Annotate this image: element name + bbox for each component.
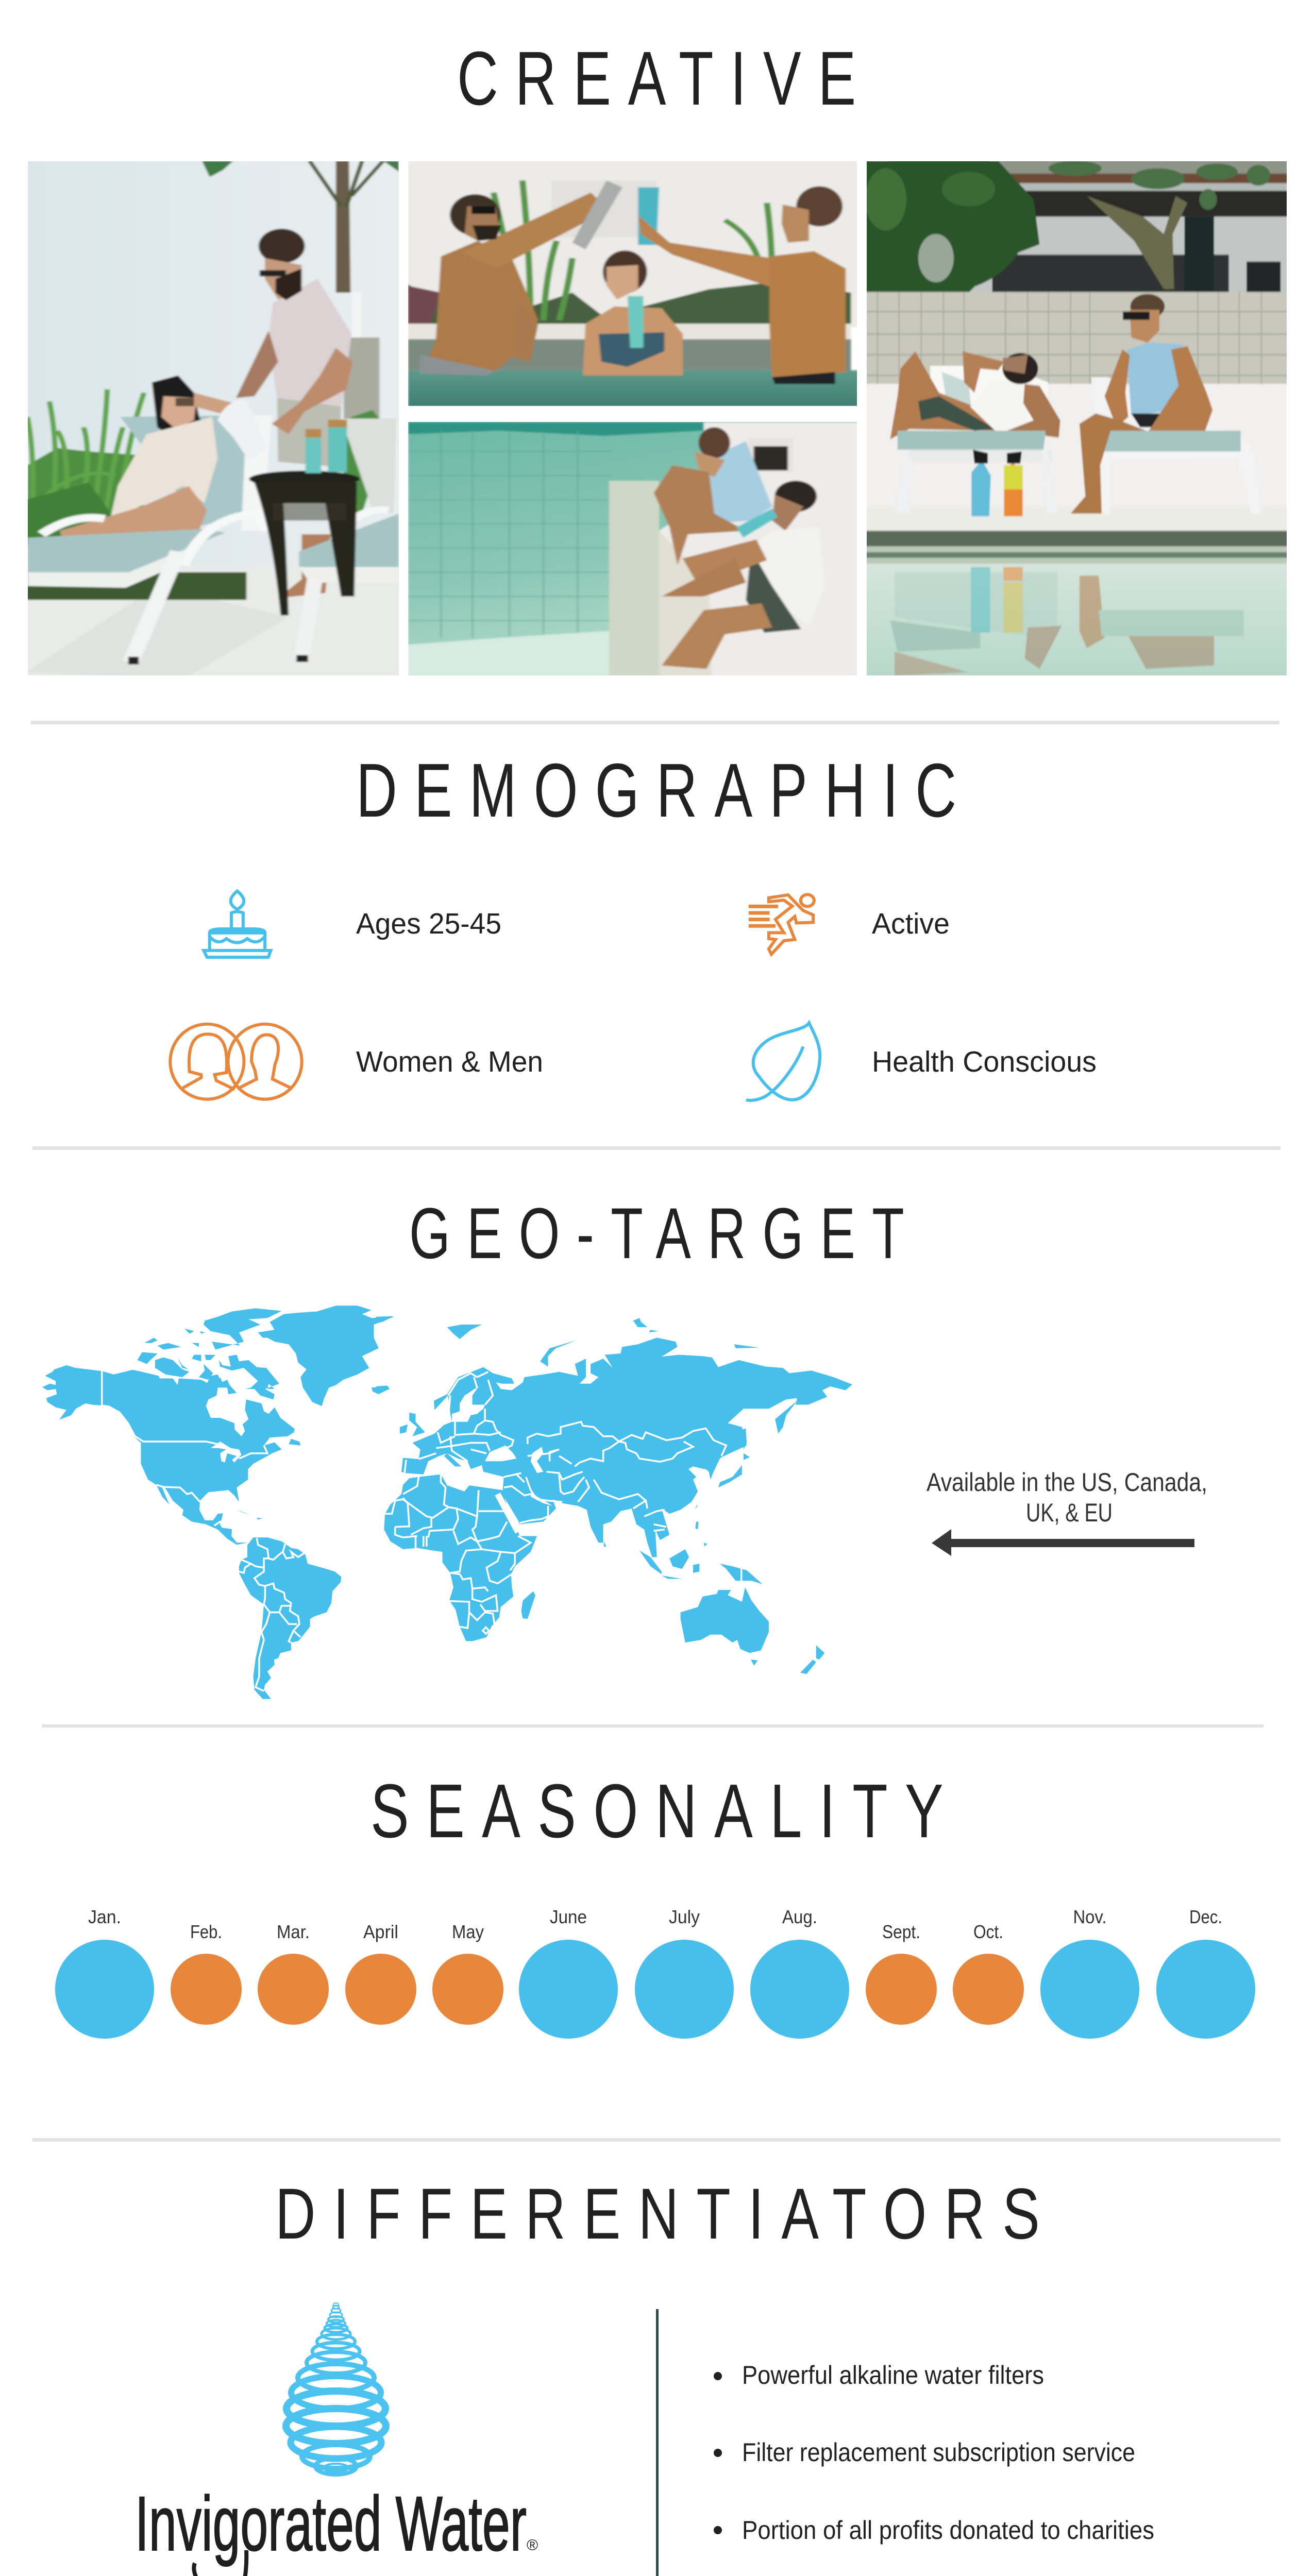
divider: under geo-target [42, 1724, 1264, 1727]
month: july: July [669, 1906, 700, 1927]
month: dec [1156, 1906, 1255, 2039]
chart: monthly seasonality circles [55, 1906, 1255, 2039]
month: nov [1040, 1906, 1139, 2039]
photo: three people toasting bottles in pool [408, 155, 865, 406]
text: availability note: UK, & EU [1026, 1498, 1113, 1527]
month: jan: Jan. [88, 1906, 121, 1927]
borders: old world [385, 1372, 742, 1634]
logo: invigorated water [135, 2303, 538, 2576]
text: registered mark: ® [527, 2537, 538, 2554]
bullet: filters: Powerful alkaline water filters [742, 2361, 1044, 2389]
greenland [258, 1306, 394, 1406]
month: oct [953, 1921, 1024, 2025]
photo: couple by lounge chair with pitcher [26, 155, 404, 679]
vertical divider [656, 2309, 659, 2576]
month: aug [750, 1906, 849, 2039]
divider: under demographic [32, 1146, 1281, 1150]
month: june: June [550, 1906, 587, 1927]
icon: leaf [746, 1023, 820, 1100]
icon: birthday cake [204, 891, 271, 957]
icon: water drop rings [286, 2303, 386, 2475]
photo: two men sitting at pool edge from above [408, 420, 867, 679]
list: differentiators [714, 2361, 1154, 2545]
bullet: charities: Portion of all profits donated to charities [742, 2516, 1154, 2545]
divider: under creative [31, 721, 1279, 724]
red sea [498, 1494, 518, 1532]
icon: g swash [194, 2550, 246, 2576]
madagascar [521, 1591, 535, 1619]
month: dec: Dec. [1189, 1906, 1222, 1927]
title: demographic: DEMOGRAPHIC [356, 748, 973, 833]
tasmania and new zealand [751, 1645, 824, 1674]
icon: woman and man profiles [170, 1024, 302, 1099]
month: july [635, 1906, 734, 2039]
text: women and men: Women & Men [356, 1045, 543, 1078]
panel: demographic attributes [170, 891, 1097, 1100]
arrow: points to map [932, 1529, 1194, 1556]
iceland [372, 1386, 389, 1394]
text: health conscious: Health Conscious [872, 1045, 1097, 1078]
month: oct: Oct. [973, 1921, 1003, 1942]
australia [681, 1587, 769, 1653]
month: mar [258, 1921, 329, 2025]
month: jan [55, 1906, 154, 2039]
panel: creative photo collage [26, 148, 1294, 679]
new guinea [720, 1564, 763, 1584]
title: seasonality: SEASONALITY [370, 1769, 961, 1854]
month: feb: Feb. [190, 1921, 222, 1942]
map: old world [376, 1316, 852, 1674]
title: differentiators: DIFFERENTIATORS [275, 2173, 1057, 2254]
month: april: April [363, 1921, 398, 1942]
text: availability note: Available in the US, Canada, [926, 1468, 1207, 1497]
great lakes [211, 1442, 242, 1463]
month: june [519, 1906, 618, 2039]
month: april [345, 1921, 416, 2025]
month: sept: Sept. [882, 1921, 920, 1942]
islands: europe and arctic [376, 1316, 760, 1436]
islands: southeast asia [604, 1504, 707, 1579]
photo: two men on loungers with bottles above pool reflection [850, 148, 1294, 677]
africa [384, 1475, 537, 1641]
title: geo-target: GEO-TARGET [409, 1193, 921, 1274]
text: availability note [926, 1468, 1207, 1527]
italy [444, 1453, 461, 1466]
text: ages: Ages 25-45 [356, 907, 501, 940]
caribbean and maritime islands [237, 1439, 300, 1519]
month: nov: Nov. [1073, 1906, 1107, 1927]
month: may [432, 1921, 503, 2025]
month: feb [171, 1921, 242, 2025]
month: aug: Aug. [782, 1906, 817, 1927]
month: may: May [452, 1921, 484, 1942]
divider: under seasonality [32, 2138, 1281, 2142]
month: mar: Mar. [277, 1921, 310, 1942]
borders: americas [102, 1371, 304, 1691]
islands: japan and sakhalin [718, 1401, 797, 1487]
inland seas [452, 1386, 553, 1506]
eurasia [401, 1337, 852, 1557]
south america [239, 1537, 341, 1699]
world map [42, 1306, 852, 1699]
map: americas and greenland [42, 1306, 394, 1699]
text: active: Active [872, 907, 950, 940]
north and central america [42, 1365, 295, 1545]
title: creative: CREATIVE [457, 36, 873, 121]
canadian arctic islands [138, 1308, 282, 1399]
icon: runner [749, 894, 814, 954]
text: wordmark: Invigorated Water [135, 2480, 527, 2567]
month: sept [866, 1921, 937, 2025]
bullet: subscription: Filter replacement subscription service [742, 2438, 1135, 2467]
